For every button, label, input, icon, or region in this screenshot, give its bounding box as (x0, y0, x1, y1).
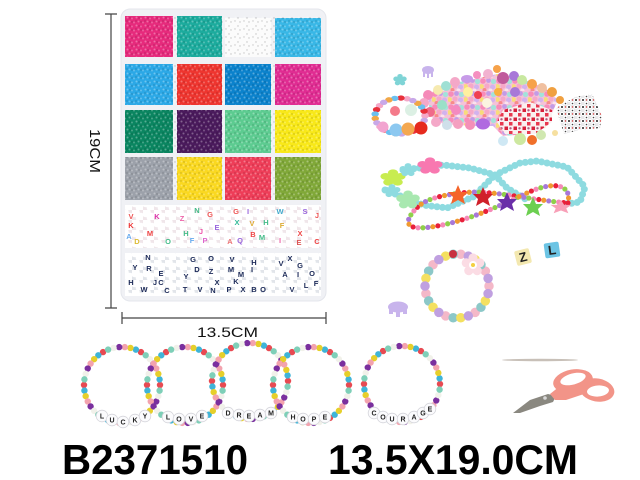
cube bead L (544, 242, 560, 258)
row 5 colored letter beads: D (134, 237, 140, 246)
row 4 seed beads (125, 157, 321, 200)
word bracelet DREAM: D (225, 410, 231, 418)
handles (550, 366, 616, 404)
word bracelet COURAGE (364, 346, 440, 425)
row 6 navy letter beads: B (251, 285, 257, 294)
row 1 seed beads (125, 16, 321, 57)
row 5 colored letter beads: B (250, 230, 256, 239)
word bracelet LOVE: L (166, 414, 171, 422)
word bracelet LUCKY: C (120, 420, 126, 426)
flower beads (378, 122, 428, 136)
word bracelet HOPE: H (290, 414, 296, 422)
row 6 navy letter beads: C (158, 278, 164, 287)
row 2 seed beads (125, 64, 321, 105)
row 5 colored letter beads: J (315, 211, 319, 220)
row 6 navy letter beads: W (140, 285, 148, 294)
blade (513, 394, 556, 413)
word bracelet COURAGE: G (420, 410, 426, 418)
pile: colorful pastel beads (428, 74, 558, 136)
row 6 navy letter beads: V (289, 285, 295, 294)
cube bead Z: Z (517, 249, 529, 265)
row 6 navy letter beads: I (297, 270, 299, 279)
row 6 navy letter beads: G (190, 255, 196, 264)
row 5 colored letter beads: G (207, 210, 213, 219)
row 5 colored letter beads: G (233, 207, 239, 216)
word bracelet COURAGE: A (411, 414, 417, 422)
row 6 navy letter beads: D (194, 265, 200, 274)
row 6 navy letter beads: F (314, 279, 319, 288)
row 5 colored letter beads: X (297, 229, 303, 238)
row 6 navy letter beads: E (158, 269, 164, 278)
word bracelet LOVE (147, 347, 223, 425)
row 6 navy letter beads: O (208, 254, 214, 263)
bracelet in pile (375, 98, 425, 134)
red bead (449, 250, 457, 258)
row 5 colored letter beads: K (154, 212, 160, 221)
pile: red and white cube beads (497, 102, 552, 134)
word bracelet LUCKY: K (132, 418, 138, 424)
row 5 colored letter beads: P (202, 236, 208, 245)
row 5 colored letter beads: N (194, 206, 200, 215)
word bracelet DREAM: R (236, 412, 242, 420)
aqua flower (393, 74, 407, 85)
row 6 navy letter beads: O (309, 269, 315, 278)
panel: bead tray (121, 9, 326, 301)
word bracelet LUCKY (84, 347, 160, 428)
icon: scissors (513, 366, 616, 413)
row 5 colored letter beads: H (183, 229, 189, 238)
row 5 colored letter beads: I (247, 207, 249, 216)
word bracelet LOVE: V (189, 416, 194, 424)
row 3 seed beads (125, 110, 321, 153)
handle openings (559, 370, 609, 397)
row 6 navy letter beads: O (260, 285, 266, 294)
word bracelet HOPE: O (300, 416, 306, 424)
row 6 navy letter beads: L (304, 281, 309, 290)
stars (448, 185, 572, 216)
dimension: height 19CM (86, 14, 117, 308)
row 6 navy letter beads: K (233, 277, 239, 286)
row 6 navy letter beads: R (146, 264, 152, 273)
row 5 colored letter beads: C (314, 237, 320, 246)
row 6 navy letter beads (125, 253, 321, 296)
row 5 colored letter beads: M (259, 233, 265, 242)
row 6 navy letter beads: C (164, 286, 170, 295)
clear letter bead (405, 104, 417, 116)
row 5 colored letter beads: E (214, 223, 220, 232)
row 5 colored letter beads: Q (237, 236, 243, 245)
lilac clip (388, 302, 408, 317)
word bracelet DREAM: A (257, 412, 263, 420)
word bracelet COURAGE: R (400, 416, 406, 424)
bead pile (375, 65, 602, 146)
row 6 navy letter beads: Y (132, 263, 138, 272)
row 5 colored letter beads: V (249, 219, 255, 228)
pile: accent beads (419, 65, 564, 146)
row 6 navy letter beads: J (153, 278, 157, 287)
row 5 colored letter beads: F (280, 221, 285, 230)
word bracelet LOVE: E (200, 414, 205, 420)
row 5 colored letter beads: J (199, 227, 203, 236)
row 5 colored letter beads: A (227, 237, 233, 246)
row 5 colored letter beads (125, 205, 321, 248)
row 5 colored letter beads: A (126, 232, 132, 241)
word bracelet HOPE (273, 347, 349, 425)
row 6 navy letter beads: Y (183, 272, 189, 281)
row 6 navy letter beads: Z (209, 267, 214, 276)
row 5 colored letter beads: W (276, 207, 284, 216)
row 6 navy letter beads: H (128, 278, 134, 287)
letter beads (96, 410, 151, 428)
word bracelet LUCKY: L (100, 414, 105, 420)
row 5 colored letter beads: Z (180, 214, 185, 223)
row 6 navy letter beads: H (251, 258, 257, 267)
row 6 navy letter beads: V (229, 255, 235, 264)
row 6 navy letter beads: X (240, 285, 246, 294)
row 5 colored letter beads: H (263, 218, 269, 227)
flowers (380, 157, 443, 208)
row 6 navy letter beads: A (282, 270, 288, 279)
row 5 colored letter beads: S (302, 207, 308, 216)
pink round bead (390, 106, 400, 116)
word bracelet HOPE: E (323, 414, 328, 422)
flower bracelet (425, 250, 489, 318)
row 6 navy letter beads: P (226, 285, 232, 294)
row 5 colored letter beads: I (279, 236, 281, 245)
row 6 navy letter beads: T (183, 285, 188, 294)
dimension: height 19CM: 19CM (86, 129, 103, 173)
word bracelet COURAGE: E (428, 406, 433, 414)
row 6 navy letter beads: X (214, 278, 220, 287)
row 6 navy letter beads: V (278, 259, 284, 268)
row 6 navy letter beads: V (197, 285, 203, 294)
scissors shadow (502, 359, 578, 361)
word bracelet DREAM: M (268, 410, 274, 418)
pivot (543, 396, 547, 400)
word bracelet DREAM (212, 343, 288, 422)
row 5 colored letter beads: O (165, 237, 171, 246)
dimension: width 13.5CM (122, 312, 326, 340)
row 5 colored letter beads: E (296, 238, 302, 247)
row 6 navy letter beads: G (297, 261, 303, 270)
row 6 navy letter beads: N (210, 286, 216, 295)
word bracelet LUCKY: U (109, 418, 115, 424)
aqua strand (385, 161, 585, 208)
row 5 colored letter beads: M (147, 229, 153, 238)
word bracelet LOVE: O (176, 416, 182, 424)
word bracelet LUCKY: Y (143, 414, 148, 420)
row 5 colored letter beads: V (128, 212, 134, 221)
row 6 navy letter beads: N (145, 253, 151, 262)
word bracelet COURAGE: O (380, 414, 386, 422)
row 5 colored letter beads: F (190, 236, 195, 245)
multicolor strand (408, 186, 569, 228)
necklace (380, 157, 585, 228)
word bracelet COURAGE: U (389, 416, 395, 424)
word bracelet COURAGE: C (371, 410, 377, 418)
row 6 navy letter beads: I (251, 265, 253, 274)
row 5 colored letter beads: X (234, 218, 240, 227)
row 5 colored letter beads: K (128, 221, 134, 230)
row 6 navy letter beads: M (238, 270, 244, 279)
word bracelet HOPE: P (312, 416, 317, 424)
lilac clip (422, 66, 434, 78)
cube bead Z (514, 248, 532, 266)
row 6 navy letter beads: X (287, 254, 293, 263)
dimension: width 13.5CM: 13.5CM (197, 324, 258, 340)
cube bead L: L (547, 242, 557, 258)
row 6 navy letter beads: M (228, 265, 234, 274)
flower charm (462, 253, 484, 275)
pile: white and black letter beads (556, 94, 602, 134)
word bracelet DREAM: E (247, 414, 252, 420)
